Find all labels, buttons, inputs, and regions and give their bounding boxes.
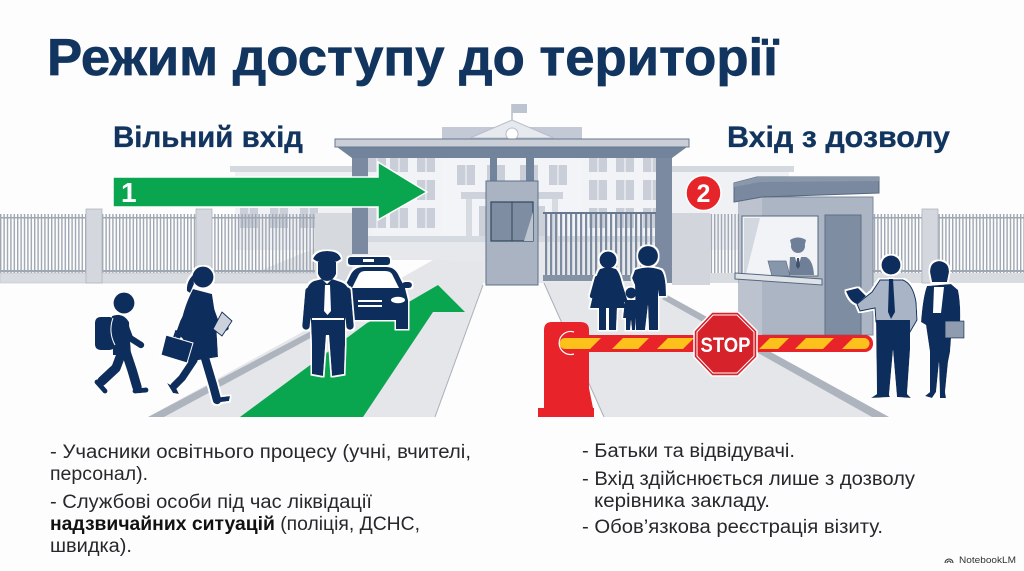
- guard in the window: [768, 238, 814, 276]
- barrier arm: [557, 335, 873, 352]
- right road: [544, 283, 889, 417]
- title: Режим доступу до території: [47, 29, 779, 87]
- stop sign: STOP: [700, 334, 750, 357]
- NotebookLM logo: NotebookLM: [959, 555, 1016, 566]
- text block: free entry list: швидка).: [50, 536, 132, 557]
- text block: free entry list: - Учасники освітнього процесу (учні, вчителі,: [50, 442, 471, 463]
- text block: entry by permission list: керівника закладу.: [594, 491, 770, 512]
- family: parents and child: [590, 246, 666, 330]
- school building background: [230, 104, 794, 283]
- guard booth: [734, 177, 879, 335]
- left road: [148, 260, 483, 417]
- green ground arrow: [240, 285, 465, 417]
- text block: entry by permission list: - Вхід здійснюється лише з дозволу: [582, 469, 916, 490]
- police car: [342, 257, 412, 329]
- text block: entry by permission list: - Обов’язкова реєстрація візиту.: [582, 517, 883, 538]
- fence right: [672, 209, 1024, 285]
- text block: free entry list: - Службові особи під час ліквідації: [50, 492, 373, 513]
- text block: free entry list: надзвичайних ситуацій (поліція, ДСНС,: [50, 514, 420, 535]
- barrier with stop sign: [538, 312, 873, 417]
- text block: free entry list: [50, 442, 471, 557]
- heading: free entry: Вільний вхід: [113, 121, 303, 154]
- figure: pupil with backpack: [95, 292, 146, 391]
- stop sign: [694, 312, 757, 376]
- figure: staff member gesturing: [846, 256, 917, 398]
- text block: entry by permission list: - Батьки та відвідувачі.: [582, 441, 795, 462]
- text block: free entry list: персонал).: [50, 464, 148, 485]
- number 2 badge: 2: [697, 180, 710, 208]
- fence left: [0, 209, 352, 283]
- figure: police officer: [306, 251, 350, 376]
- number 2 badge: [686, 176, 721, 210]
- number 1: 1: [121, 177, 137, 208]
- figure: female staff member: [921, 261, 964, 398]
- text block: entry by permission list: [582, 441, 916, 538]
- heading: entry by permission: Вхід з дозволу: [727, 121, 950, 154]
- figure: teacher with briefcase: [161, 266, 232, 403]
- green arrow to the building: [113, 162, 427, 220]
- gate structure: [335, 139, 689, 285]
- barrier post: [544, 322, 593, 408]
